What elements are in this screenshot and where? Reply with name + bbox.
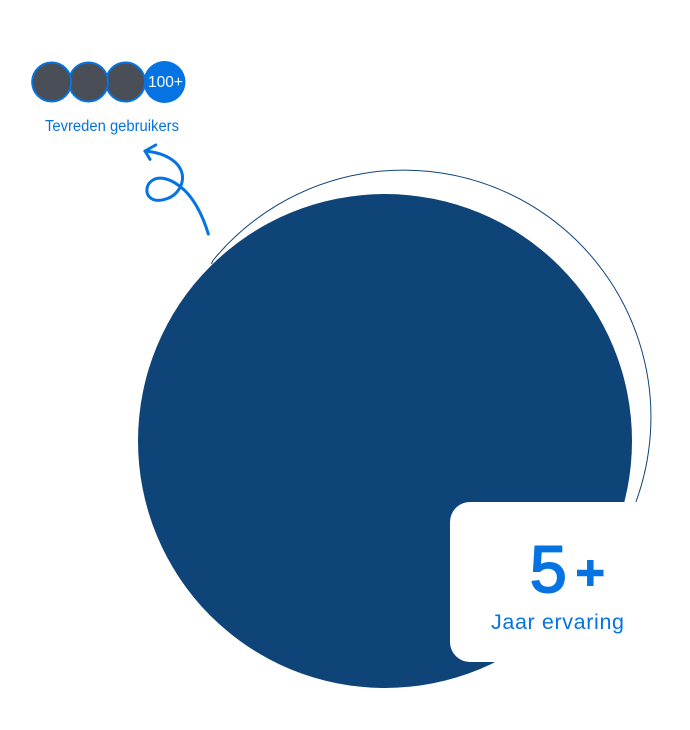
avatar 1 [32,62,71,102]
stat number: 5 [530,532,567,606]
count badge [144,61,186,103]
card background [450,502,690,662]
avatar 3 [106,62,145,102]
users caption: Tevreden gebruikers [45,118,179,135]
avatar 2 [69,62,108,102]
count text: 100+ [148,74,183,91]
outline arc [212,170,651,515]
main circle [138,194,632,688]
avatar group [32,61,186,103]
experience card [450,502,690,662]
icon: curly arrow [145,145,208,234]
stat label: Jaar ervaring [491,610,624,634]
stat plus [577,560,604,586]
